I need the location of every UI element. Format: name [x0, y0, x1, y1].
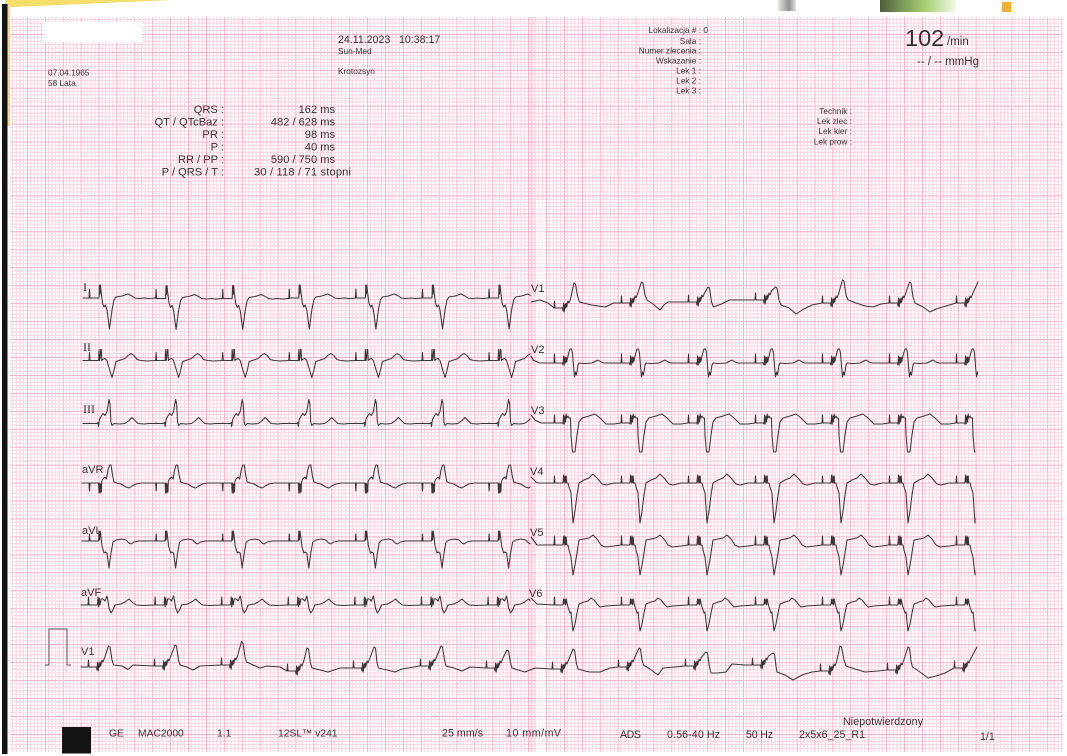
ECG trace: lead V6	[531, 597, 1023, 631]
lead labels: V1	[531, 283, 544, 295]
text block: measurement labels	[155, 104, 224, 178]
ECG trace: rhythm strip V1	[81, 642, 977, 680]
paper seam in the middle	[529, 17, 545, 752]
text block: order fields: Wskazanie :	[656, 56, 701, 66]
text block: measurement values: 98 ms	[305, 129, 335, 141]
lead labels: III	[83, 402, 95, 416]
footer: recording settings: 25 mm/s	[442, 728, 483, 740]
footer: recording settings: 50 Hz	[746, 729, 773, 741]
footer: recording settings: 10 mm/mV	[506, 728, 562, 740]
text block: patient data: 07.04.1965	[48, 68, 90, 78]
text block: date and site: Krotozsyn	[338, 66, 375, 76]
ECG trace: lead V3	[531, 414, 1023, 452]
lead labels	[81, 280, 544, 658]
lead labels: V6	[529, 588, 542, 600]
text block: measurement values: 30 / 118 / 71 stopni	[254, 166, 351, 178]
footer: device info: 12SL™ v241	[278, 728, 338, 740]
ECG trace: lead V1	[531, 280, 978, 314]
footer: recording settings: 2x5x6_25_R1	[799, 729, 865, 741]
text block: order fields: Numer zlecenia :	[639, 46, 701, 56]
text block: staff fields	[814, 106, 852, 146]
lead labels: I	[83, 280, 87, 294]
scan edge: yellow folder strip	[5, 0, 172, 126]
text block: order fields: Lek 1 :	[676, 66, 701, 76]
lead labels: V2	[531, 344, 544, 356]
ECG trace: lead aVF	[81, 596, 555, 613]
footer: unconfirmed status: Niepotwierdzony	[843, 716, 924, 728]
footer: recording settings: ADS	[620, 729, 641, 741]
scan edge: black left border	[2, 4, 8, 754]
ECG trace: lead III	[83, 400, 556, 426]
lead labels: aVL	[82, 525, 102, 537]
text block: order fields	[639, 25, 708, 96]
text block: staff fields: Lek zlec :	[817, 116, 852, 126]
lead labels: V3	[531, 405, 544, 417]
blood pressure: -- / -- mmHg	[917, 56, 979, 68]
ECG trace: lead II	[83, 350, 556, 378]
text block: measurement values	[254, 104, 351, 178]
text block: date and site: Sun-Med	[338, 46, 372, 56]
text block: measurement values: 482 / 628 ms	[271, 116, 335, 128]
footer: recording settings	[442, 728, 995, 743]
text block: measurement labels: P :	[211, 142, 224, 154]
text block: measurement labels: P / QRS / T :	[162, 166, 224, 178]
text block: staff fields: Lek prow :	[814, 136, 852, 146]
footer: device info: GE	[109, 728, 124, 740]
text block: date and site: 10:38:17	[399, 34, 440, 46]
patient name redaction	[44, 22, 142, 42]
lead labels: II	[83, 340, 91, 354]
lead labels: V5	[530, 527, 543, 539]
ECG trace: lead aVR	[82, 465, 556, 493]
lead labels: V4	[530, 466, 543, 478]
heart rate	[905, 25, 969, 51]
lead labels: V1	[81, 646, 94, 658]
footer: device info: 1.1	[217, 728, 232, 740]
text block: date and site: 24.11.2023	[338, 34, 390, 46]
ECG trace: lead V2	[531, 349, 1023, 377]
calibration pulse	[45, 629, 71, 665]
footer: recording settings: 1/1	[980, 731, 995, 743]
heart rate: /min	[947, 36, 969, 48]
text block: measurement labels: RR / PP :	[178, 154, 224, 166]
footer: device info	[109, 728, 338, 740]
ECG trace: lead I	[83, 285, 556, 330]
text block: order fields: Lek 2 :	[676, 76, 701, 86]
text block: measurement values: 162 ms	[299, 104, 335, 116]
text block: measurement labels: QRS :	[194, 104, 224, 116]
ECG trace: lead aVL	[82, 531, 556, 568]
text block: measurement labels: PR :	[202, 129, 224, 141]
scan edge: objects at top right	[778, 0, 1011, 12]
text block: date and site	[338, 34, 440, 76]
text block: measurement values: 590 / 750 ms	[271, 154, 335, 166]
text block: order fields: Lokalizacja # : 0	[648, 25, 708, 35]
lead labels: aVR	[82, 464, 103, 476]
lead labels: aVF	[81, 587, 101, 599]
text block: patient data	[48, 68, 90, 88]
text block: patient data: 58 Lata	[48, 78, 76, 88]
text block: staff fields: Lek kier :	[818, 126, 852, 136]
ECG trace: lead V5	[531, 535, 1023, 575]
text block: measurement values: 40 ms	[305, 142, 335, 154]
footer: recording settings: 0.56-40 Hz	[667, 729, 720, 741]
ECG trace: lead V4	[531, 474, 1023, 523]
black registration square	[62, 727, 91, 754]
text block: measurement labels: QT / QTcBaz :	[155, 116, 224, 128]
footer: device info: MAC2000	[138, 728, 184, 740]
text block: order fields: Sala :	[680, 36, 701, 46]
text block: order fields: Lek 3 :	[676, 86, 701, 96]
heart rate: 102	[905, 25, 944, 51]
text block: staff fields: Technik :	[819, 106, 852, 116]
